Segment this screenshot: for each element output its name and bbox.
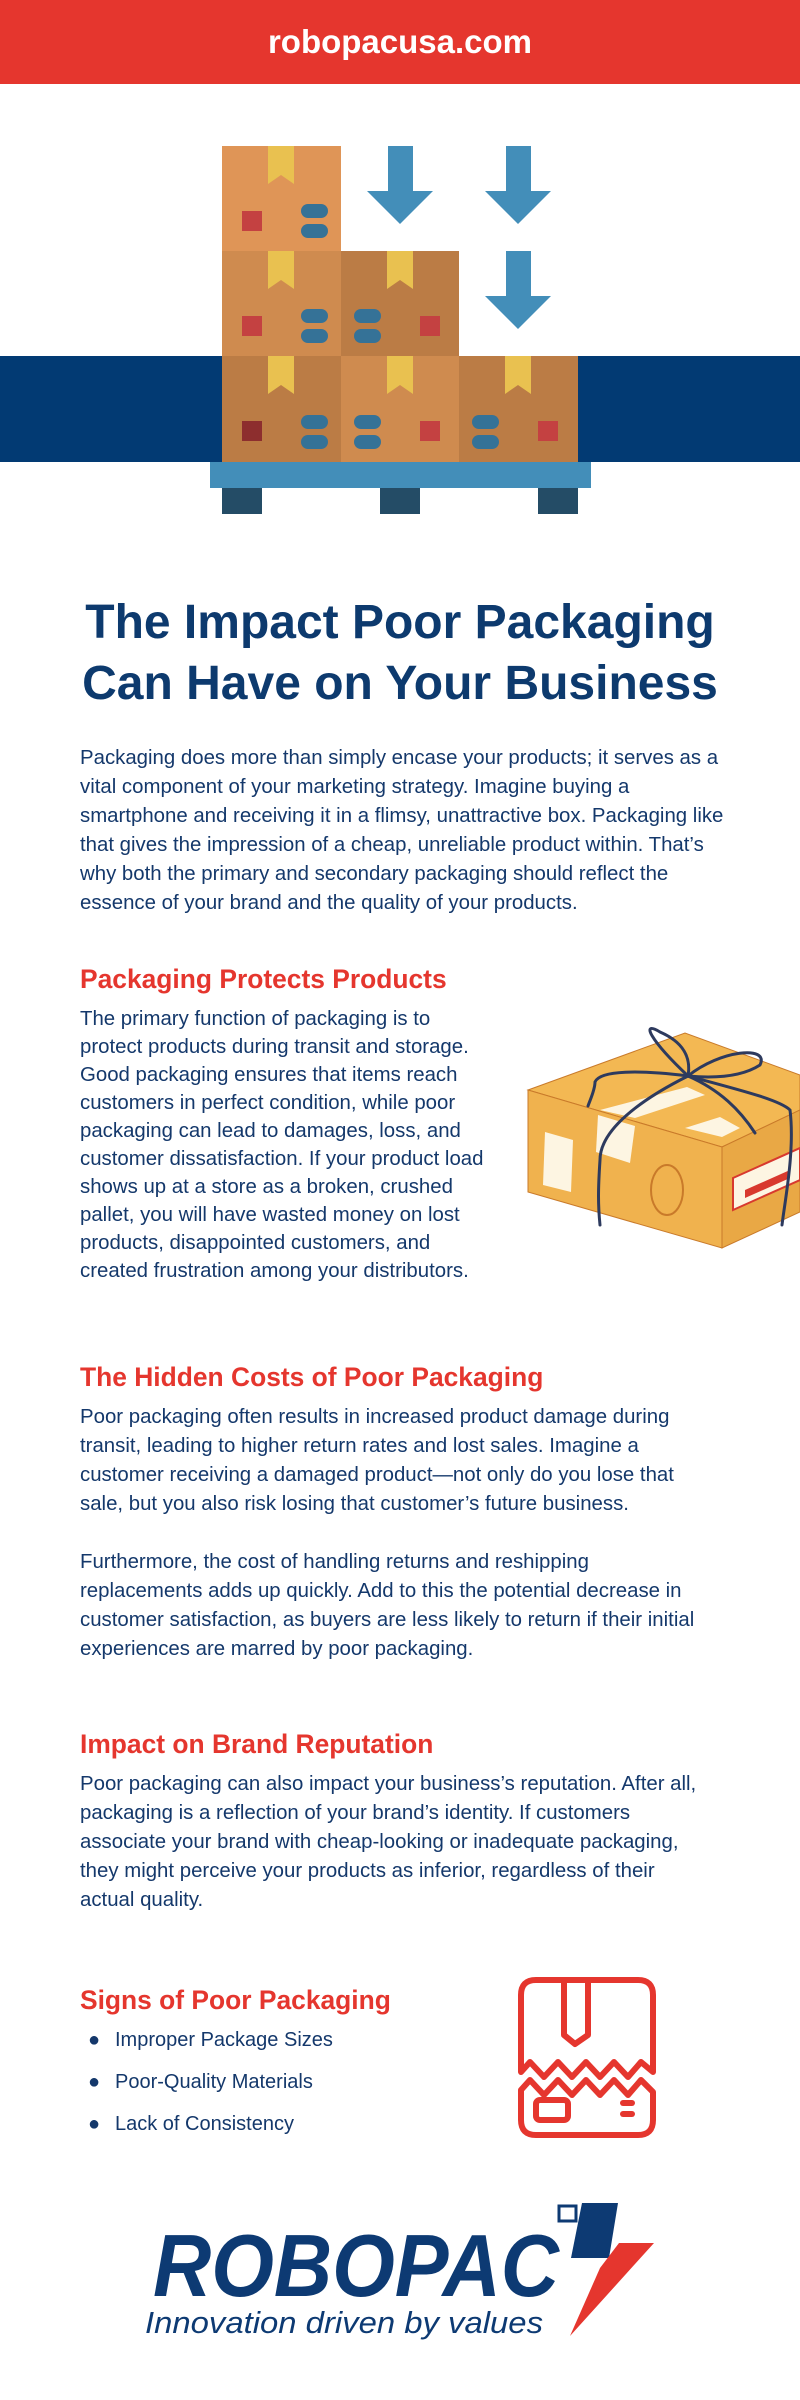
bullet list: Lack of Consistency <box>115 2113 294 2135</box>
illustration: tied parcel box <box>526 1027 800 1249</box>
intro paragraph: smartphone and receiving it in a flimsy, unattractive box. Packaging like <box>80 805 723 827</box>
paragraph: hidden costs: sale, but you also risk losing that customer’s future business. <box>80 1493 629 1515</box>
intro paragraph: essence of your brand and the quality of your products. <box>80 892 578 914</box>
paragraph: hidden costs: experiences are marred by poor packaging. <box>80 1638 473 1660</box>
title <box>82 596 718 710</box>
bullet list: ● <box>88 2071 100 2093</box>
paragraph: hidden costs: replacements adds up quickly. Add to this the potential decrease in <box>80 1580 682 1602</box>
paragraph: protects: packaging can lead to damages, loss, and <box>80 1120 461 1142</box>
paragraph: protects: Good packaging ensures that items reach <box>80 1064 457 1086</box>
paragraph: reputation: actual quality. <box>80 1889 203 1911</box>
paragraph: reputation: associate your brand with cheap-looking or inadequate packaging, <box>80 1831 679 1853</box>
title: The Impact Poor Packaging <box>85 596 715 649</box>
intro paragraph: Packaging does more than simply encase your products; it serves as a <box>80 747 718 769</box>
heading: Packaging Protects Products: Packaging Protects Products <box>80 964 447 994</box>
hero illustration: boxes on pallet <box>0 146 800 514</box>
paragraph: reputation: Poor packaging can also impact your business’s reputation. After all, <box>80 1773 696 1795</box>
header bar <box>0 0 800 84</box>
intro paragraph: that gives the impression of a cheap, unreliable product within. That’s <box>80 834 704 856</box>
paragraph: protects: shows up at a store as a broken, crushed <box>80 1176 453 1198</box>
navy band <box>0 356 800 462</box>
paragraph: reputation: they might perceive your products as inferior, regardless of their <box>80 1860 655 1882</box>
paragraph: hidden costs <box>80 1406 694 1660</box>
paragraph: hidden costs: customer receiving a damaged product—not only do you lose that <box>80 1464 674 1486</box>
bullet list: Improper Package Sizes <box>115 2029 333 2051</box>
paragraph: reputation: packaging is a reflection of your brand’s identity. If customers <box>80 1802 630 1824</box>
bullet list <box>88 2029 333 2135</box>
paragraph: protects: The primary function of packaging is to <box>80 1008 430 1030</box>
paragraph: hidden costs: Furthermore, the cost of handling returns and reshipping <box>80 1551 589 1573</box>
paragraph: hidden costs: transit, leading to higher return rates and lost sales. Imagine a <box>80 1435 639 1457</box>
paragraph: protects: created frustration among your distributors. <box>80 1260 469 1282</box>
heading: Hidden Costs: The Hidden Costs of Poor Packaging <box>80 1362 543 1392</box>
icon: broken box <box>518 1977 656 2138</box>
heading: Brand Reputation: Impact on Brand Reputation <box>80 1729 433 1759</box>
bullet list: ● <box>88 2113 100 2135</box>
paragraph: reputation <box>80 1773 696 1911</box>
paragraph: protects: products, disappointed customers, and <box>80 1232 430 1254</box>
paragraph: protects <box>80 1008 483 1282</box>
bullet list: Poor-Quality Materials <box>115 2071 313 2093</box>
intro paragraph: vital component of your marketing strategy. Imagine buying a <box>80 776 629 798</box>
arrows <box>367 146 551 329</box>
paragraph: protects: protect products during transit and storage. <box>80 1036 469 1058</box>
paragraph: hidden costs: customer satisfaction, as buyers are less likely to return if their initial <box>80 1609 694 1631</box>
paragraph: protects: customer dissatisfaction. If your product load <box>80 1148 483 1170</box>
heading: Signs: Signs of Poor Packaging <box>80 1985 391 2015</box>
intro paragraph: why both the primary and secondary packaging should reflect the <box>80 863 668 885</box>
title: Can Have on Your Business <box>82 657 718 710</box>
intro paragraph <box>80 747 723 914</box>
paragraph: protects: customers in perfect condition, while poor <box>80 1092 455 1114</box>
bullet list: ● <box>88 2029 100 2051</box>
paragraph: protects: pallet, you will have wasted money on lost <box>80 1204 460 1226</box>
logo: ROBOPAC: Innovation driven by values <box>145 2305 543 2340</box>
logo: ROBOPAC: ROBOPAC <box>153 2216 560 2315</box>
header bar: robopacusa.com <box>268 23 532 60</box>
paragraph: hidden costs: Poor packaging often results in increased product damage during <box>80 1406 669 1428</box>
logo: ROBOPAC <box>145 2203 654 2340</box>
